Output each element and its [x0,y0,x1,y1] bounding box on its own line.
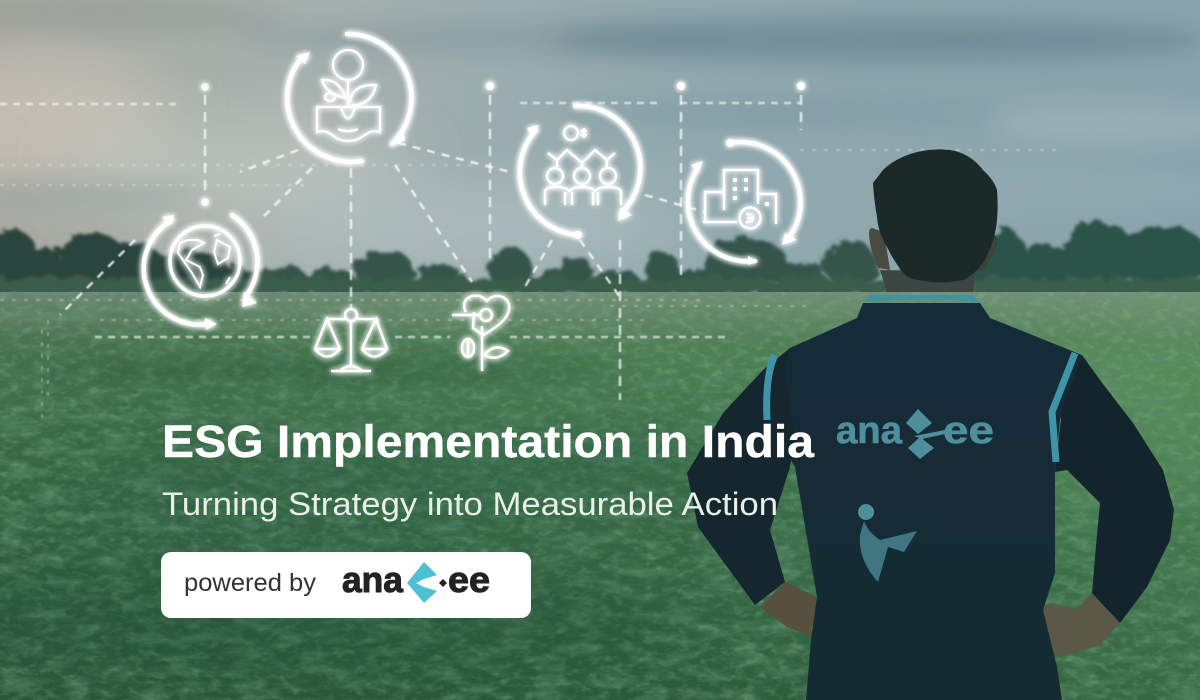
powered-by badge [161,552,531,618]
HUD dashed network lines [0,95,1060,420]
person: left sleeve [687,348,795,605]
badge logo: anaxee: ana [342,559,404,600]
icon: globe with cycle arrows [144,215,258,330]
subtitle: Turning Strategy into Measurable Action [162,486,778,522]
icon: heart flower [452,296,509,371]
photo background: sky [0,0,1200,300]
jacket print: anaxee logo: ee [943,410,994,452]
title: ESG Implementation in India [162,416,815,467]
man seen from behind in anaxee jacket [687,149,1174,700]
badge logo: anaxee: ee [448,559,490,600]
person: right hand [1018,593,1120,657]
person: ears and neck [869,228,997,292]
person: right sleeve [1055,355,1174,623]
jacket print: anaxee logo [836,409,994,459]
person: jacket torso [768,303,1082,700]
photo background: tree line [0,222,1200,300]
badge label: powered by [184,569,317,597]
icon: city buildings with cycle arrows [688,139,801,265]
person: hair [873,149,998,282]
icon: plant in soil with cycle arrows [287,34,412,162]
person: left hand [760,582,832,637]
photo background: green field [0,292,1200,700]
person: teal collar [863,295,980,302]
person: teal shoulder trims [767,353,1075,462]
icon: community of people with cycle arrows [520,106,640,239]
jacket print: anaxee logo: ana [836,410,903,452]
HUD node dots [201,82,805,206]
jacket print: bird emblem [858,504,917,582]
badge logo: anaxee [342,559,490,603]
icon: balance scales [315,309,387,371]
